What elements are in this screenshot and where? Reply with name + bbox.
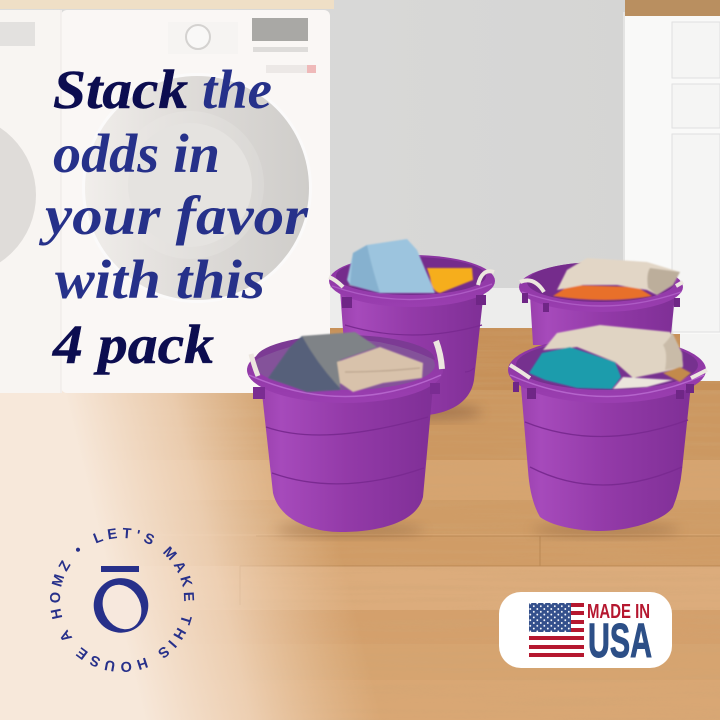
line 2: odds in (53, 123, 220, 184)
bucket body (340, 290, 484, 416)
circular tagline: LET'S MAKE THIS HOUSE A HOMZ • (50, 528, 194, 672)
control panel details (168, 22, 238, 54)
bucket rim (247, 337, 443, 403)
baseboard (330, 288, 630, 330)
washing machine: left (0, 10, 62, 393)
bucket rim (508, 337, 706, 403)
logo badge (50, 528, 194, 672)
door rings (82, 73, 312, 303)
bucket: front right (508, 325, 707, 537)
bucket body (260, 375, 434, 532)
line 1: dark word: Stack (53, 59, 189, 120)
room background: wall (0, 0, 720, 400)
laundry: cream and teal towels (529, 325, 691, 389)
laundry: blue towel and orange cloth (347, 239, 473, 293)
rim tabs (253, 383, 440, 399)
line 4: with this (55, 249, 265, 310)
countertop above washers (0, 0, 334, 9)
rope handles (329, 271, 494, 287)
bucket ribs (525, 420, 688, 485)
bucket: back left (329, 239, 495, 420)
floor (0, 328, 720, 720)
bucket: back right (519, 258, 683, 345)
bucket: front left (247, 332, 443, 537)
bucket ribs (266, 417, 428, 484)
bucket rim (519, 262, 683, 312)
bucket body (530, 295, 675, 345)
rope handles (520, 280, 683, 292)
US flag (529, 603, 584, 657)
ring path for tagline (60, 538, 184, 662)
badge text: MADE IN (587, 600, 650, 623)
laundry: gray shirt and beige cloth (268, 332, 423, 392)
bucket rim (329, 255, 495, 307)
rim tabs (522, 293, 680, 312)
made in USA badge: USA (588, 615, 652, 668)
rope handles (251, 354, 258, 376)
rim tabs (342, 295, 486, 308)
bucket ribs (345, 325, 482, 372)
line 3: your favor (38, 185, 309, 246)
line 5: 4 pack (52, 314, 215, 375)
rim tabs (513, 382, 694, 399)
cabinet on right (623, 0, 720, 381)
bucket body (520, 375, 692, 531)
logo mark (94, 566, 148, 636)
headline (38, 59, 309, 375)
line 1: blue word: the (202, 59, 272, 120)
washing machine: main (61, 10, 330, 393)
rope handles (510, 365, 707, 378)
display (252, 18, 308, 41)
made in USA badge (499, 592, 672, 668)
control knob (186, 25, 210, 49)
laundry: orange cloth and beige towel (553, 258, 680, 300)
